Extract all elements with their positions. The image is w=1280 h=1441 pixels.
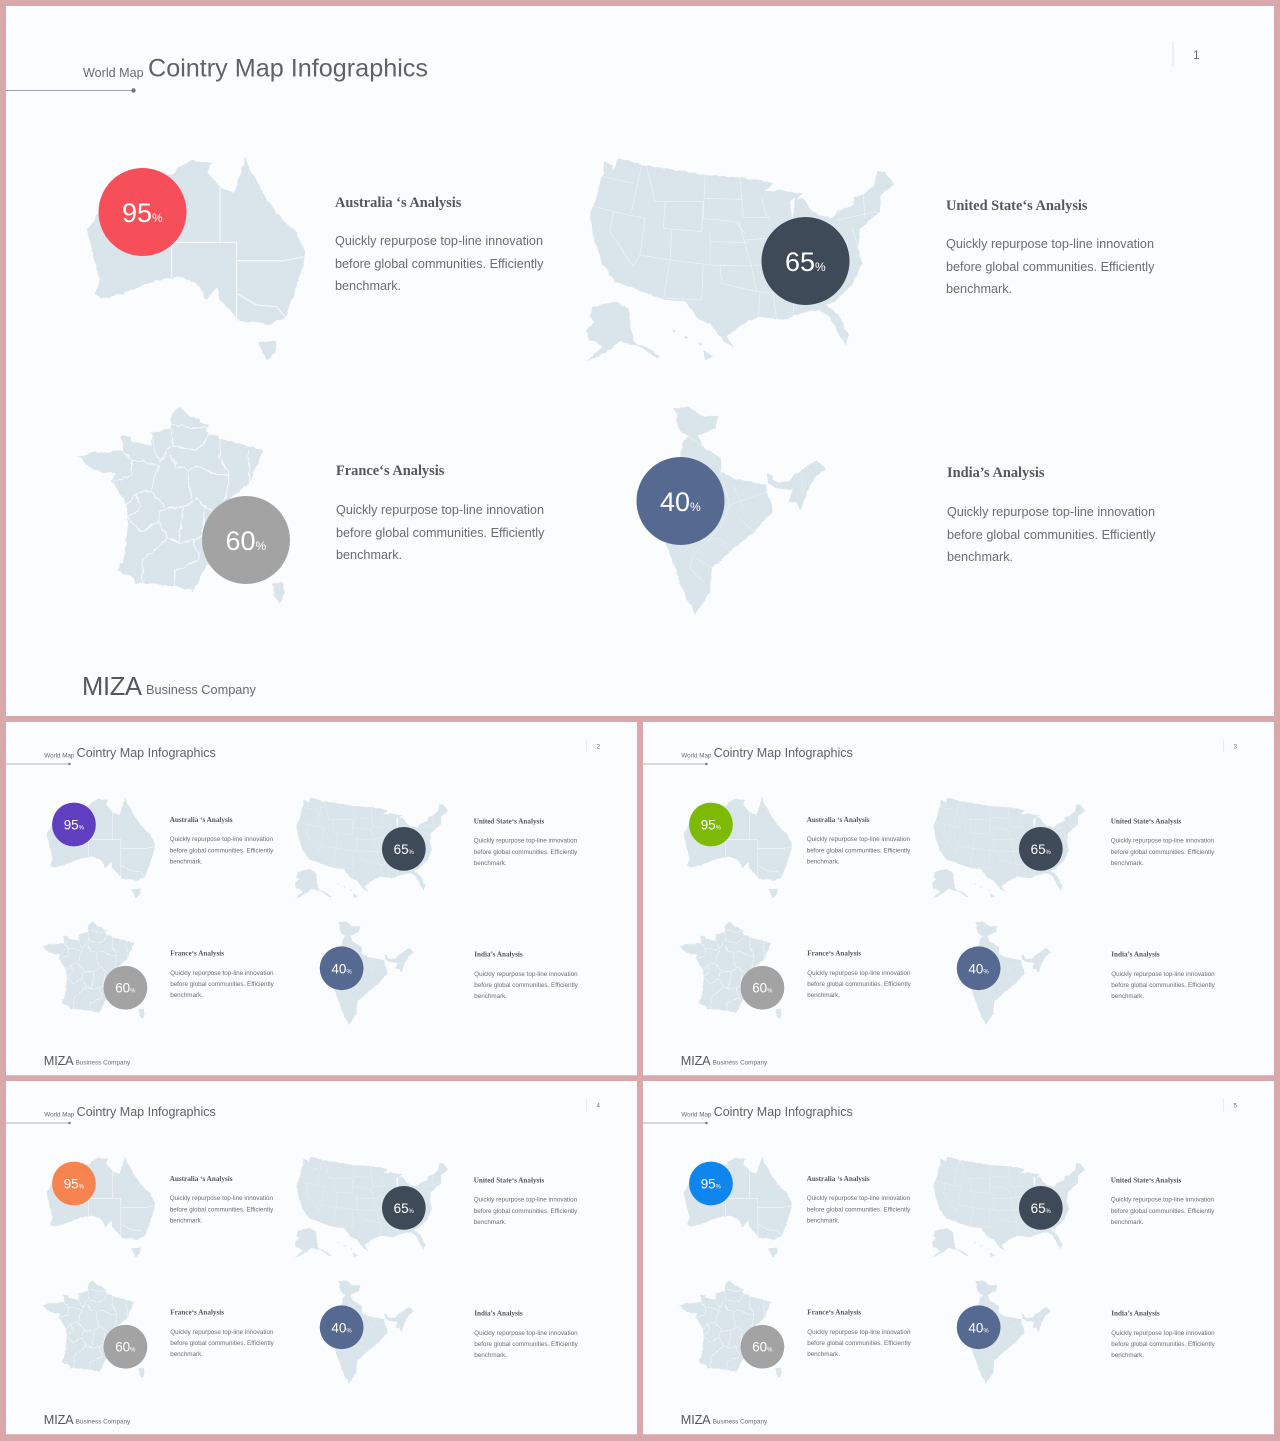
- badge: United States 65%: 65%: [394, 842, 415, 857]
- text: Australia analysis: Quickly repurpose top-line innovation: [807, 1195, 911, 1202]
- text: India analysis: Quickly repurpose top-line innovation: [474, 1330, 578, 1337]
- text: India analysis: Quickly repurpose top-line innovation: [474, 971, 578, 978]
- text: United States analysis: [474, 1177, 578, 1226]
- badge: Australia 95%: [689, 1162, 733, 1205]
- page number: 3: [1234, 744, 1238, 750]
- badge: Australia 95%: [52, 803, 96, 846]
- text: Australia analysis: Australia ‘s Analysis: [170, 1175, 233, 1183]
- footer brand: MIZA: [44, 1413, 74, 1427]
- badge: India 40%: 40%: [331, 1320, 352, 1335]
- title: Cointry Map Infographics: [77, 746, 216, 760]
- text: United States analysis: [474, 818, 578, 867]
- text: France analysis: before global communities. Efficiently: [170, 1340, 275, 1347]
- badge: India 40%: [957, 1305, 1001, 1349]
- map: India: [328, 1280, 414, 1384]
- text: United States analysis: benchmark.: [474, 1219, 507, 1226]
- title underline pointer: [6, 1122, 71, 1124]
- page number: 5: [1234, 1103, 1238, 1109]
- page number: [587, 1098, 601, 1111]
- text: United States analysis: benchmark.: [474, 860, 507, 867]
- footer brand: [681, 1054, 768, 1068]
- footer brand: [44, 1054, 131, 1068]
- text: France analysis: France‘s Analysis: [807, 949, 861, 957]
- text: Australia analysis: benchmark.: [807, 1217, 840, 1224]
- text: India analysis: before global communities. Efficiently: [1111, 982, 1216, 989]
- map: India: [328, 921, 414, 1025]
- text: France analysis: Quickly repurpose top-line innovation: [170, 1329, 274, 1336]
- text: France analysis: France‘s Analysis: [170, 1308, 224, 1316]
- title: Cointry Map Infographics: [714, 746, 853, 760]
- text: United States analysis: [946, 198, 1155, 296]
- badge: India 40%: 40%: [968, 961, 989, 976]
- text: Australia analysis: Quickly repurpose top-line innovation: [807, 836, 911, 843]
- text: Australia analysis: benchmark.: [807, 858, 840, 865]
- footer brand: MIZA: [44, 1054, 74, 1068]
- footer brand: Business Company: [76, 1418, 131, 1425]
- text: United States analysis: before global communities. Efficiently: [1111, 849, 1215, 856]
- text: United States analysis: United State‘s Analysis: [474, 818, 544, 826]
- text: Australia analysis: benchmark.: [170, 858, 203, 865]
- badge: Australia 95%: [689, 803, 733, 846]
- title: Cointry Map Infographics: [714, 1105, 853, 1119]
- badge: Australia 95%: 95%: [64, 1176, 85, 1191]
- title underline pointer: [643, 763, 708, 765]
- text: India analysis: India’s Analysis: [947, 465, 1045, 481]
- text: United States analysis: Quickly repurpose top-line innovation: [474, 1196, 578, 1203]
- text: France analysis: Quickly repurpose top-line innovation: [170, 970, 274, 977]
- text: Australia analysis: Australia ‘s Analysis: [807, 1175, 870, 1183]
- text: United States analysis: before global communities. Efficiently: [1111, 1208, 1215, 1215]
- map: United States: [294, 798, 448, 899]
- text: India analysis: Quickly repurpose top-line innovation: [947, 505, 1155, 519]
- badge: Australia 95%: 95%: [701, 1176, 722, 1191]
- text: India analysis: before global communities. Efficiently: [474, 1341, 579, 1348]
- title: World Map: [44, 752, 75, 759]
- text: United States analysis: United State‘s Analysis: [946, 198, 1088, 214]
- text: Australia analysis: Australia ‘s Analysis: [170, 816, 233, 824]
- badge: France 60%: [202, 496, 290, 584]
- text: United States analysis: [1111, 1177, 1215, 1226]
- badge: India 40%: 40%: [968, 1320, 989, 1335]
- text: France analysis: [336, 463, 545, 562]
- text: Australia analysis: benchmark.: [170, 1217, 203, 1224]
- footer brand: [681, 1413, 768, 1427]
- badge: United States 65%: 65%: [1031, 842, 1052, 857]
- page number: 4: [597, 1103, 601, 1109]
- panel: slide 5: [643, 1081, 1274, 1434]
- text: France analysis: [807, 949, 912, 999]
- text: India analysis: benchmark.: [474, 993, 507, 1000]
- text: Australia analysis: Quickly repurpose top-line innovation: [335, 234, 543, 248]
- text: India analysis: Quickly repurpose top-line innovation: [1111, 971, 1215, 978]
- map: Australia: [46, 797, 155, 898]
- footer brand: MIZA: [681, 1054, 711, 1068]
- text: Australia analysis: Australia ‘s Analysis: [807, 816, 870, 824]
- text: France analysis: Quickly repurpose top-line innovation: [807, 970, 911, 977]
- badge: France 60%: [104, 1325, 147, 1369]
- map: Australia: [46, 1156, 155, 1257]
- text: Australia analysis: [170, 816, 274, 865]
- map: India: [653, 407, 825, 615]
- footer brand: Business Company: [76, 1059, 131, 1066]
- text: France analysis: benchmark.: [170, 992, 203, 999]
- map: France: [679, 921, 782, 1020]
- map: France: [42, 921, 145, 1020]
- badge: France 60%: 60%: [115, 1340, 136, 1355]
- text: United States analysis: [1111, 818, 1215, 867]
- text: Australia analysis: Quickly repurpose top-line innovation: [170, 1195, 274, 1202]
- page number: 2: [597, 744, 601, 750]
- text: Australia analysis: before global communities. Efficiently: [807, 1206, 911, 1213]
- badge: France 60%: 60%: [752, 981, 773, 996]
- badge: France 60%: 60%: [752, 1340, 773, 1355]
- text: Australia analysis: before global communities. Efficiently: [170, 1206, 274, 1213]
- text: France analysis: Quickly repurpose top-line innovation: [807, 1329, 911, 1336]
- text: France analysis: benchmark.: [336, 548, 402, 562]
- text: Australia analysis: [335, 195, 544, 293]
- page number: [1224, 1098, 1238, 1111]
- badge: United States 65%: [382, 827, 426, 871]
- text: India analysis: [474, 950, 579, 1000]
- text: India analysis: benchmark.: [474, 1352, 507, 1359]
- panel: main slide 1: [6, 6, 1274, 716]
- map: United States: [585, 158, 893, 362]
- text: India analysis: benchmark.: [1111, 993, 1144, 1000]
- text: United States analysis: before global communities. Efficiently: [474, 1208, 578, 1215]
- text: India analysis: India’s Analysis: [1111, 1309, 1160, 1317]
- text: France analysis: Quickly repurpose top-line innovation: [336, 503, 544, 517]
- badge: India 40%: [636, 457, 724, 545]
- text: India analysis: India’s Analysis: [474, 1309, 523, 1317]
- page number: [1173, 41, 1200, 67]
- text: United States analysis: benchmark.: [1111, 1219, 1144, 1226]
- text: India analysis: before global communities. Efficiently: [474, 982, 579, 989]
- title: World Map: [681, 1111, 712, 1118]
- text: Australia analysis: before global communities. Efficiently: [170, 847, 274, 854]
- text: France analysis: France‘s Analysis: [336, 463, 445, 479]
- text: France analysis: [170, 1308, 275, 1358]
- footer brand: MIZA: [82, 673, 142, 701]
- badge: India 40%: [957, 946, 1001, 990]
- badge: India 40%: [320, 946, 364, 990]
- text: Australia analysis: [170, 1175, 274, 1224]
- title: World Map: [44, 1111, 75, 1118]
- text: United States analysis: benchmark.: [1111, 860, 1144, 867]
- title underline pointer: [643, 1122, 708, 1124]
- text: France analysis: before global communities. Efficiently: [336, 526, 545, 540]
- badge: France 60%: [741, 966, 784, 1010]
- badge: France 60%: [741, 1325, 784, 1369]
- text: United States analysis: Quickly repurpose top-line innovation: [1111, 1196, 1215, 1203]
- text: France analysis: before global communities. Efficiently: [807, 981, 912, 988]
- badge: India 40%: [320, 1305, 364, 1349]
- title: Cointry Map Infographics: [148, 54, 428, 82]
- text: India analysis: India’s Analysis: [1111, 950, 1160, 958]
- badge: France 60%: 60%: [226, 526, 267, 556]
- badge: United States 65%: 65%: [785, 247, 826, 277]
- text: India analysis: [1111, 950, 1216, 1000]
- footer brand: Business Company: [146, 682, 256, 697]
- badge: Australia 95%: [52, 1162, 96, 1205]
- text: France analysis: benchmark.: [170, 1351, 203, 1358]
- text: France analysis: benchmark.: [807, 1351, 840, 1358]
- map: France: [42, 1280, 145, 1379]
- map: Australia: [683, 1156, 792, 1257]
- title: Cointry Map Infographics: [77, 1105, 216, 1119]
- badge: Australia 95%: 95%: [64, 817, 85, 832]
- text: France analysis: before global communities. Efficiently: [170, 981, 275, 988]
- text: Australia analysis: before global communities. Efficiently: [335, 257, 544, 271]
- text: United States analysis: before global communities. Efficiently: [474, 849, 578, 856]
- text: Australia analysis: before global communities. Efficiently: [807, 847, 911, 854]
- map: India: [965, 1280, 1051, 1384]
- text: India analysis: India’s Analysis: [474, 950, 523, 958]
- badge: France 60%: [104, 966, 147, 1010]
- text: United States analysis: before global communities. Efficiently: [946, 260, 1155, 274]
- page number: [1224, 739, 1238, 752]
- text: India analysis: benchmark.: [1111, 1352, 1144, 1359]
- badge: United States 65%: [1019, 1186, 1063, 1230]
- text: United States analysis: Quickly repurpose top-line innovation: [474, 837, 578, 844]
- map: United States: [931, 1157, 1085, 1258]
- panel: slide 3: [643, 722, 1274, 1075]
- page number: 1: [1193, 48, 1200, 62]
- panel: slide 2: [6, 722, 637, 1075]
- badge: United States 65%: 65%: [394, 1201, 415, 1216]
- badge: Australia 95%: 95%: [122, 198, 163, 228]
- badge: United States 65%: [1019, 827, 1063, 871]
- footer brand: Business Company: [713, 1059, 768, 1066]
- badge: United States 65%: [762, 217, 850, 305]
- text: India analysis: Quickly repurpose top-line innovation: [1111, 1330, 1215, 1337]
- title: World Map: [83, 66, 144, 80]
- badge: Australia 95%: [98, 168, 186, 256]
- text: United States analysis: Quickly repurpose top-line innovation: [946, 237, 1154, 251]
- panel: slide 4: [6, 1081, 637, 1434]
- badge: United States 65%: [382, 1186, 426, 1230]
- badge: India 40%: 40%: [660, 487, 701, 517]
- map: France: [679, 1280, 782, 1379]
- page number: [587, 739, 601, 752]
- text: India analysis: [947, 465, 1156, 564]
- footer brand: [82, 673, 256, 701]
- text: France analysis: France‘s Analysis: [807, 1308, 861, 1316]
- text: France analysis: [170, 949, 275, 999]
- title underline pointer: [6, 88, 136, 93]
- footer brand: [44, 1413, 131, 1427]
- footer brand: Business Company: [713, 1418, 768, 1425]
- text: France analysis: France‘s Analysis: [170, 949, 224, 957]
- text: Australia analysis: Quickly repurpose top-line innovation: [170, 836, 274, 843]
- text: Australia analysis: [807, 1175, 911, 1224]
- map: United States: [931, 798, 1085, 899]
- text: India analysis: benchmark.: [947, 550, 1013, 564]
- text: Australia analysis: benchmark.: [335, 279, 401, 293]
- text: Australia analysis: [807, 816, 911, 865]
- badge: United States 65%: 65%: [1031, 1201, 1052, 1216]
- map: France: [78, 407, 285, 605]
- text: France analysis: benchmark.: [807, 992, 840, 999]
- badge: Australia 95%: 95%: [701, 817, 722, 832]
- title: World Map: [681, 752, 712, 759]
- text: United States analysis: United State‘s Analysis: [1111, 1177, 1181, 1185]
- text: United States analysis: United State‘s Analysis: [474, 1177, 544, 1185]
- text: India analysis: [1111, 1309, 1216, 1359]
- text: India analysis: before global communities. Efficiently: [1111, 1341, 1216, 1348]
- badge: France 60%: 60%: [115, 981, 136, 996]
- map: Australia: [683, 797, 792, 898]
- text: United States analysis: United State‘s Analysis: [1111, 818, 1181, 826]
- text: India analysis: before global communities. Efficiently: [947, 528, 1156, 542]
- footer brand: MIZA: [681, 1413, 711, 1427]
- title underline pointer: [6, 763, 71, 765]
- text: France analysis: [807, 1308, 912, 1358]
- text: United States analysis: Quickly repurpose top-line innovation: [1111, 837, 1215, 844]
- text: Australia analysis: Australia ‘s Analysis: [335, 195, 462, 211]
- badge: India 40%: 40%: [331, 961, 352, 976]
- map: United States: [294, 1157, 448, 1258]
- text: United States analysis: benchmark.: [946, 282, 1012, 296]
- map: India: [965, 921, 1051, 1025]
- text: France analysis: before global communities. Efficiently: [807, 1340, 912, 1347]
- text: India analysis: [474, 1309, 579, 1359]
- map: Australia: [87, 157, 305, 360]
